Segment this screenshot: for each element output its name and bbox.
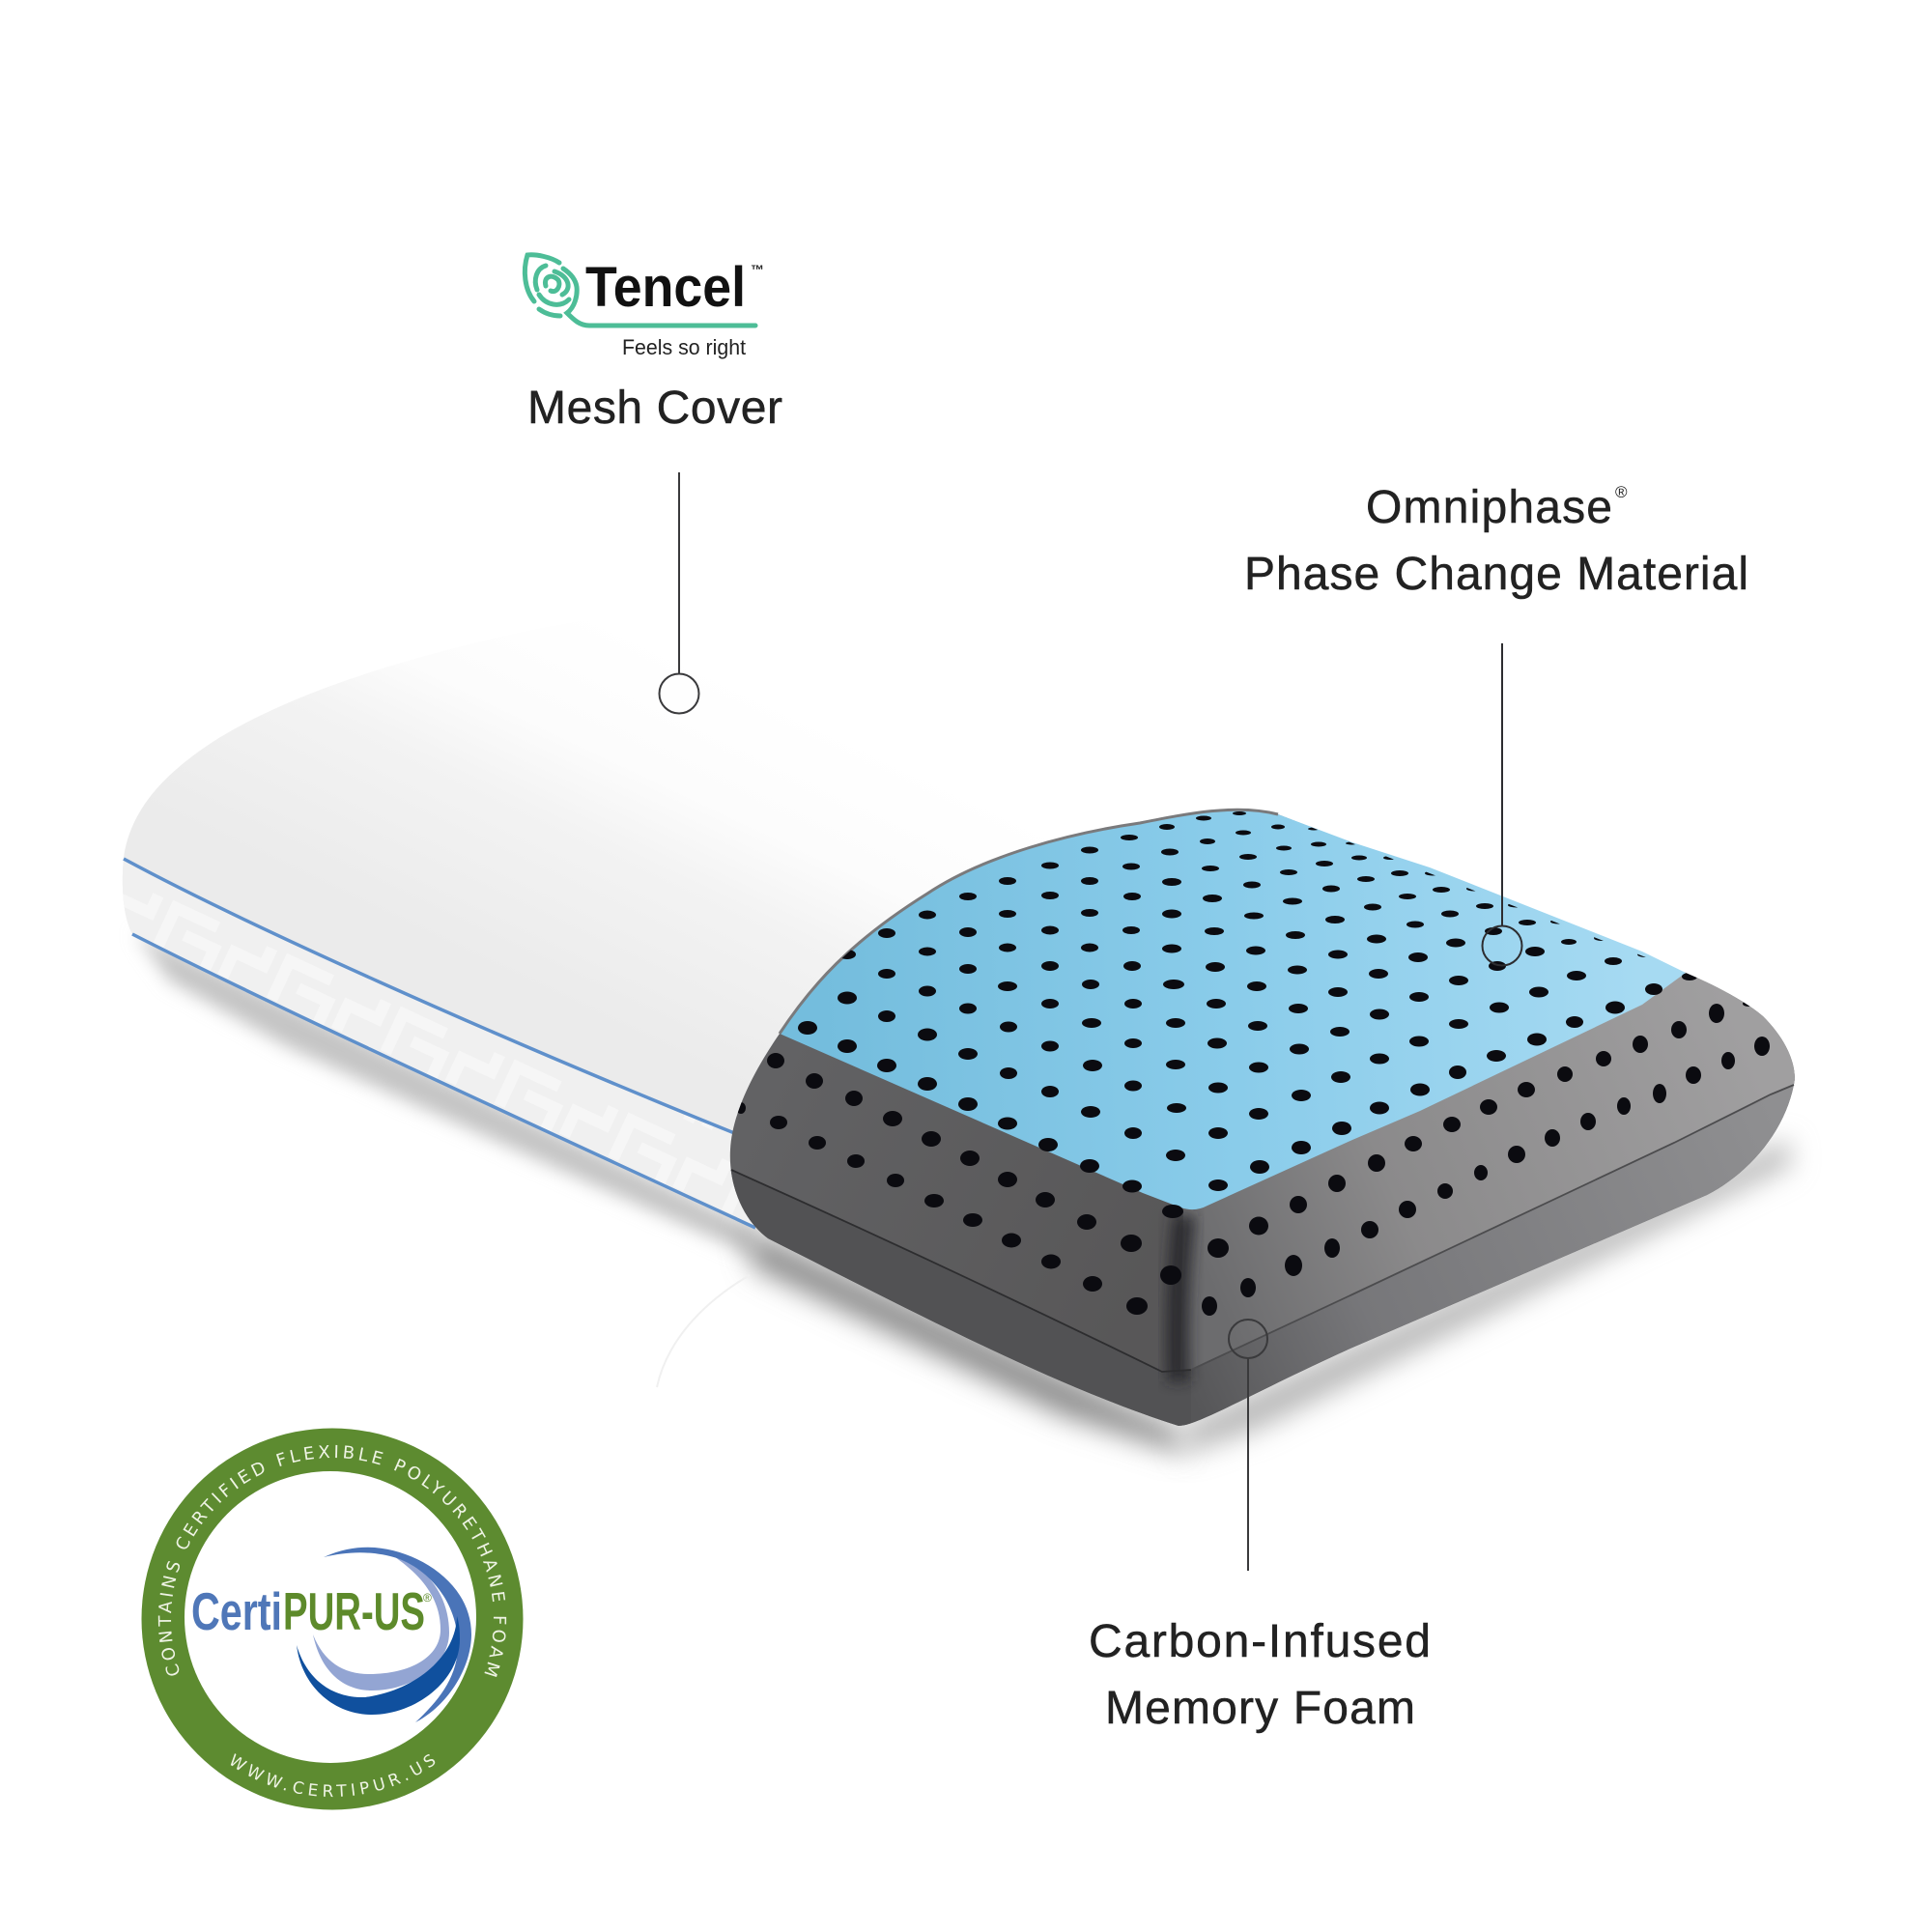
CertiPUR-US wordmark: ® — [423, 1591, 432, 1605]
ring text bottom: WWW.CERTIPUR.US — [230, 1753, 435, 1797]
callout: carbon-infused memory foam — [1089, 1320, 1431, 1734]
carbon foam body — [730, 814, 1795, 1426]
seam line left — [731, 1170, 1191, 1372]
swirl icon — [297, 1548, 471, 1722]
ring text top: CONTAINS CERTIFIED FLEXIBLE POLYURETHANE FOAM — [158, 1445, 506, 1677]
omniphase label: Omniphase — [1366, 482, 1612, 533]
pillow mesh cover — [123, 681, 871, 1230]
CertiPUR-US seal — [141, 1428, 524, 1810]
mesh cover label: Mesh Cover — [527, 383, 782, 434]
seam line right — [1191, 1085, 1794, 1370]
perforations on left foam face — [736, 1053, 1181, 1315]
perforations on right foam face — [1202, 1001, 1770, 1316]
carbon-infused label: Carbon-Infused — [1089, 1616, 1431, 1667]
piping top — [124, 859, 744, 1137]
perforations on blue top — [798, 811, 1697, 1218]
callout: mesh cover — [525, 255, 782, 713]
back arc outline — [780, 810, 1278, 1034]
phase change material label: Phase Change Material — [1244, 549, 1748, 600]
CertiPUR-US wordmark: PUR-US — [283, 1581, 425, 1641]
tagline: Feels so right — [622, 335, 746, 359]
Tencel logo — [525, 255, 764, 359]
leaf icon — [525, 255, 755, 326]
CertiPUR-US wordmark — [191, 1581, 432, 1641]
side gusset band — [124, 893, 738, 1213]
trademark: ™ — [751, 262, 764, 277]
piping bottom — [132, 934, 755, 1228]
cast shadow — [135, 932, 1792, 1454]
carbon foam leader line and marker — [1229, 1320, 1267, 1571]
Tencel wordmark: Tencel — [585, 256, 746, 319]
green ring — [141, 1428, 524, 1810]
pillow illustration — [97, 604, 1835, 1454]
foam cutaway — [730, 808, 1795, 1426]
blue phase change top — [780, 810, 1686, 1209]
mesh cover leader line and marker — [659, 472, 699, 713]
CertiPUR-US wordmark: Certi — [191, 1581, 282, 1641]
omniphase label: ® — [1615, 483, 1628, 501]
memory foam label: Memory Foam — [1105, 1683, 1415, 1734]
callout: phase change material — [1244, 482, 1748, 966]
phase change leader line and marker — [1482, 643, 1522, 966]
